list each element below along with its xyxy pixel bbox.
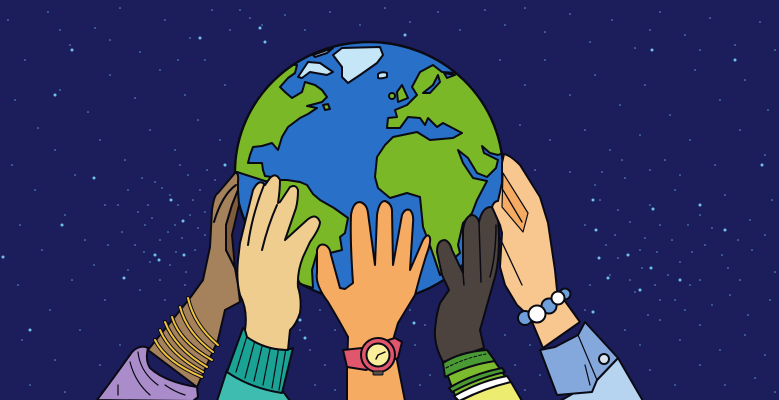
shirt cuff <box>540 322 618 395</box>
striped green sleeve <box>443 350 522 400</box>
baltic sea <box>423 75 440 93</box>
islands: britain, ireland, caribbean <box>397 85 408 102</box>
gold bangles <box>155 298 218 377</box>
wristwatch <box>343 338 402 375</box>
shirt sleeve <box>560 358 643 400</box>
globe <box>234 40 503 295</box>
hand: orange with watch <box>317 201 430 400</box>
shaded finger <box>226 190 239 268</box>
shaded fingers <box>502 173 528 232</box>
hand: dark with striped sleeve <box>435 207 522 400</box>
south america <box>270 180 348 288</box>
north america <box>236 64 328 182</box>
bead bracelet <box>518 288 570 325</box>
cuff button <box>599 354 609 364</box>
teal cuff <box>227 328 293 393</box>
hand: cream <box>217 175 320 400</box>
hand: brown with bangles <box>97 173 240 400</box>
teal sleeve <box>217 370 290 400</box>
continents <box>225 47 520 288</box>
hand: peach with bracelet <box>492 154 643 400</box>
globe outline <box>235 42 503 302</box>
polar ice: greenland, arctic islands, iceland <box>298 47 387 83</box>
purple sleeve <box>97 347 198 400</box>
ocean <box>235 42 503 302</box>
eurasia and africa <box>374 64 501 276</box>
